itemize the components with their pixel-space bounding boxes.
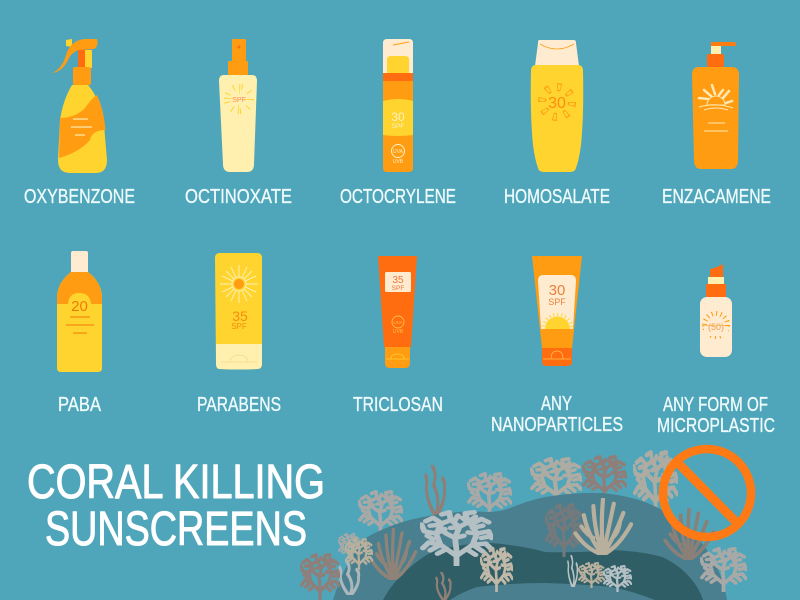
label: triclosan: TRICLOSAN — [353, 394, 443, 416]
coral: beige bush — [531, 459, 581, 503]
coral: small beige bush — [579, 563, 604, 588]
title: CORAL KILLING — [27, 456, 325, 509]
bottle: oxybenzone spray — [52, 39, 107, 173]
coral: pale kelp — [568, 556, 577, 587]
label: any nanoparticles: NANOPARTICLES — [491, 414, 623, 436]
coral: beige fan — [575, 499, 631, 555]
bottle: homosalate: 30 — [548, 95, 566, 112]
bottle: octocrylene: UVA — [393, 149, 404, 155]
label: octocrylene: OCTOCRYLENE — [340, 186, 456, 208]
coral: tall beige branch — [634, 453, 677, 513]
bottle: octinoxate spray: SPF — [232, 97, 246, 104]
tube: triclosan: UVB — [393, 329, 404, 335]
coral: pale loop — [340, 561, 359, 595]
bottle: parabens: SPF — [231, 322, 247, 331]
reef: front hill — [450, 583, 655, 600]
coral: beige bush lower — [481, 549, 512, 592]
coral: brown bush — [583, 457, 626, 499]
label: oxybenzone: OXYBENZONE — [24, 186, 135, 208]
coral: small pale bush — [604, 566, 631, 592]
reef: dark middle hill — [383, 543, 703, 600]
reef illustration — [301, 453, 746, 600]
label: octinoxate: OCTINOXATE — [185, 186, 292, 208]
tube: nanoparticles — [532, 256, 582, 366]
coral: red brown bush — [301, 555, 339, 600]
tube: nanoparticles: 30 — [549, 282, 565, 299]
label: any nanoparticles: ANY — [541, 393, 572, 415]
coral: gray bush right — [701, 549, 746, 592]
coral: gray upper left — [338, 534, 360, 559]
tube: triclosan: 35 — [392, 275, 404, 286]
label: enzacamene: ENZACAMENE — [662, 186, 771, 208]
coral: big pale coral — [421, 512, 492, 566]
bottle: octocrylene: SPF — [392, 123, 404, 130]
coral: brown kelp — [426, 466, 445, 515]
label: paba: PABA — [58, 394, 102, 416]
label: homosalate: HOMOSALATE — [504, 186, 610, 208]
bottle: paba: 20 — [71, 298, 88, 315]
bottle: paba — [57, 251, 102, 372]
bottle: parabens — [215, 253, 262, 370]
bottle: octinoxate spray — [219, 39, 257, 172]
bottle: parabens: 35 — [232, 308, 248, 324]
icon: prohibition sign — [663, 449, 751, 537]
bottle: enzacamene pump — [692, 42, 739, 169]
label: any form of microplastic: ANY FORM OF — [663, 394, 768, 416]
bottle: homosalate — [531, 40, 583, 172]
coral: back gray bush — [359, 492, 402, 534]
label: any form of microplastic — [657, 394, 775, 437]
coral: gray bush center — [468, 474, 511, 516]
title: SUNSCREENS — [45, 503, 307, 556]
tube: triclosan — [378, 256, 417, 368]
tube: nanoparticles: SPF — [548, 297, 566, 307]
bottle: octocrylene — [383, 39, 413, 172]
reef: outer hill — [333, 493, 727, 600]
tube: triclosan: UVA — [394, 320, 402, 325]
coral: brown fan behind sign — [665, 509, 713, 560]
bottle: octocrylene: UVB — [393, 159, 404, 165]
coral: beige bush left — [346, 539, 372, 570]
bottle: octocrylene: 30 — [391, 110, 405, 124]
bottle: microplastic: (50) — [708, 322, 724, 332]
label: any nanoparticles — [491, 393, 623, 436]
coral: brown fan left — [372, 529, 416, 580]
bottle: microplastic — [700, 264, 732, 357]
title — [27, 456, 325, 556]
coral: muted dark coral — [546, 505, 582, 557]
tube: triclosan: SPF — [392, 285, 404, 292]
label: parabens: PARABENS — [197, 394, 281, 416]
coral: small brown kelp — [436, 573, 451, 600]
